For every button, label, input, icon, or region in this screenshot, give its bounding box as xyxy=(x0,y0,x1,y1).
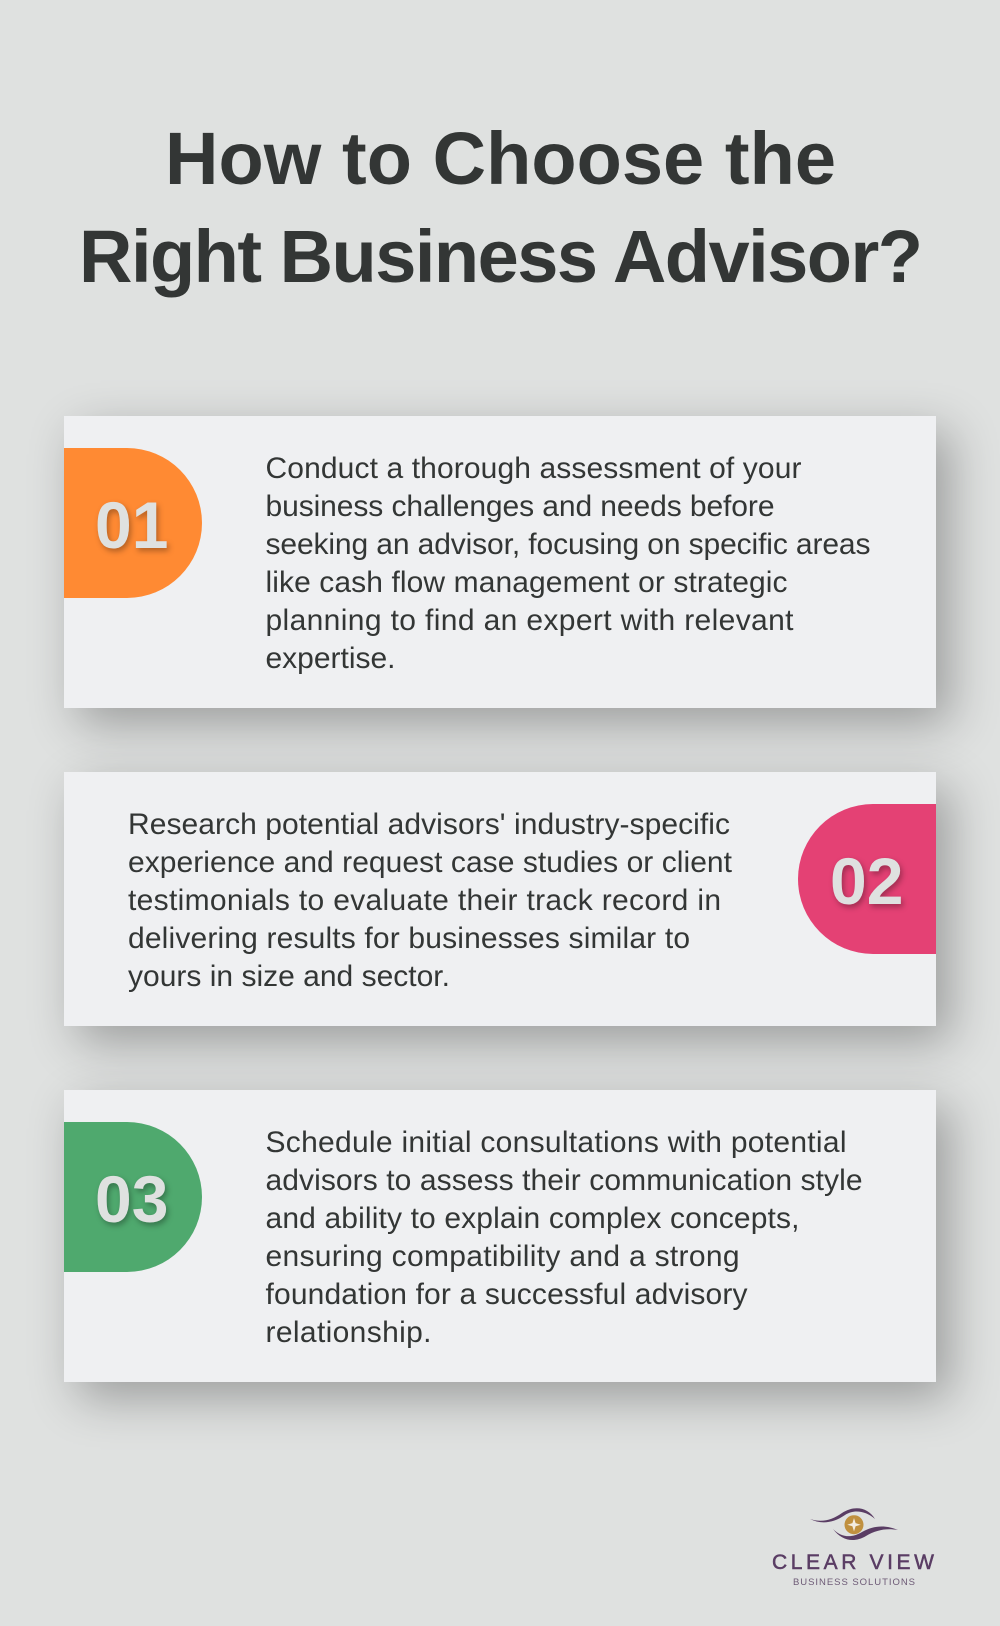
text: step 03 description: advisors to assess their communication style xyxy=(266,1164,862,1197)
panel: step 02 xyxy=(64,772,936,1026)
text: step 03 description: foundation for a successful advisory xyxy=(266,1278,748,1311)
text: step 02 description: Research potential advisors' industry-specific xyxy=(128,808,730,841)
number: 01: 01 xyxy=(95,488,168,562)
text: step 03 description xyxy=(266,1126,862,1349)
title: How to Choose the xyxy=(165,117,836,200)
icon: gold circle with star xyxy=(844,1515,864,1534)
text: step 03 description: ensuring compatibility and a strong xyxy=(266,1240,740,1273)
text: step 01 description xyxy=(266,452,870,675)
title: Right Business Advisor? xyxy=(79,215,923,298)
text: step 01 description: like cash flow management or strategic xyxy=(266,566,788,599)
text: step 01 description: planning to find an expert with relevant xyxy=(266,604,794,637)
text: step 01 description: business challenges and needs before xyxy=(266,490,774,523)
text: step 03 description: and ability to explain complex concepts, xyxy=(266,1202,800,1235)
text: step 02 description xyxy=(128,808,733,993)
badge: 03 xyxy=(64,1122,202,1272)
badge: 01 xyxy=(64,448,202,598)
text: step 01 description: Conduct a thorough assessment of your xyxy=(266,452,802,485)
text: step 02 description: experience and request case studies or client xyxy=(128,846,733,879)
logo wordmark: CLEAR VIEW xyxy=(772,1551,934,1574)
text: step 03 description: relationship. xyxy=(266,1316,432,1349)
logo tagline: BUSINESS SOLUTIONS xyxy=(793,1577,915,1588)
number: 03: 03 xyxy=(95,1162,168,1236)
text: step 01 description: seeking an advisor, focusing on specific areas xyxy=(266,528,870,561)
number: 02: 02 xyxy=(830,844,903,918)
icon: eye upper swoosh xyxy=(810,1508,875,1522)
text: step 01 description: expertise. xyxy=(266,642,396,675)
title xyxy=(79,117,923,298)
text: step 03 description: Schedule initial consultations with potential xyxy=(266,1126,846,1159)
icon: eye lower swoosh xyxy=(833,1526,898,1540)
text: step 02 description: delivering results for businesses similar to xyxy=(128,922,690,955)
badge: 02 xyxy=(798,804,936,954)
panel: step 01 xyxy=(64,416,936,708)
text: step 02 description: yours in size and sector. xyxy=(128,960,450,993)
text: step 02 description: testimonials to evaluate their track record in xyxy=(128,884,721,917)
panel: step 03 xyxy=(64,1090,936,1382)
